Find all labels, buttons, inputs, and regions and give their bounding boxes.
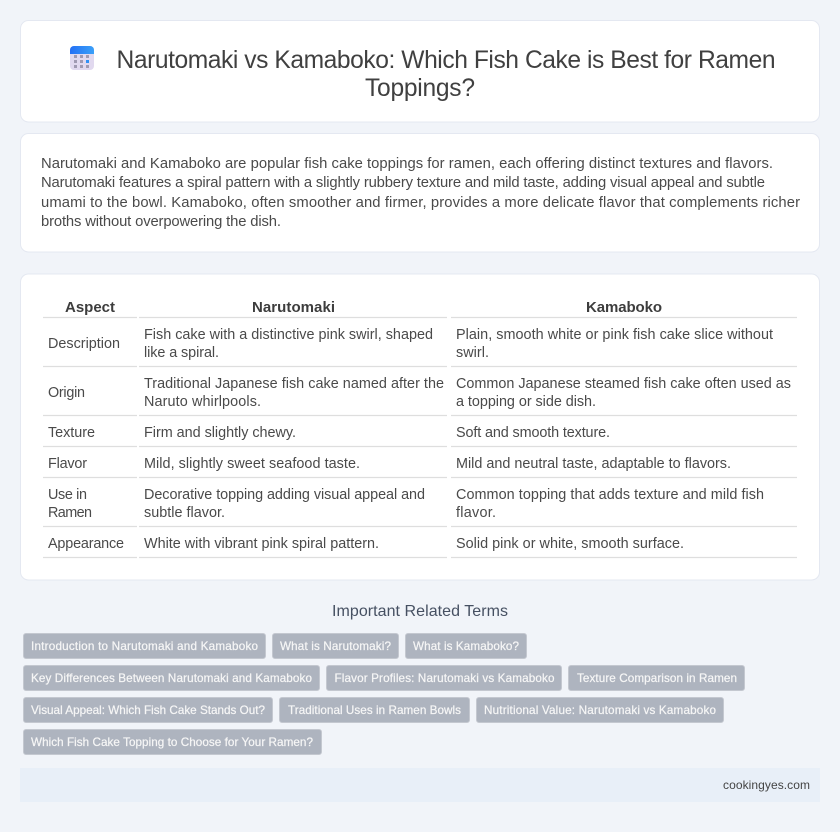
panel: title header	[20, 20, 820, 122]
title: Narutomaki vs Kamaboko: Which Fish Cake is Best for Ramen	[116, 47, 776, 74]
tag: which topping	[24, 730, 322, 754]
row: appearance: White with vibrant pink spiral pattern.	[144, 536, 379, 552]
row: origin: a topping or side dish.	[456, 394, 596, 410]
row: flavor: Mild and neutral taste, adaptable to flavors.	[456, 456, 731, 472]
table header: Aspect	[65, 299, 115, 316]
title	[116, 47, 776, 102]
tag: nutritional value	[476, 698, 724, 722]
footer	[20, 768, 820, 802]
row: flavor: Mild, slightly sweet seafood taste.	[144, 456, 360, 472]
row: use in ramen: subtle flavor.	[144, 505, 225, 521]
row: use in ramen	[48, 487, 764, 521]
row: flavor: Flavor	[48, 456, 87, 472]
row: flavor	[48, 456, 731, 472]
row: texture: Firm and slightly chewy.	[144, 425, 296, 441]
tag: introduction	[24, 634, 266, 658]
row: texture	[48, 425, 610, 441]
row: use in ramen: Ramen	[48, 505, 92, 521]
row: texture: Texture	[48, 425, 95, 441]
row: appearance: Appearance	[48, 536, 124, 552]
row: description: Fish cake with a distinctive pink swirl, shaped	[144, 327, 433, 343]
tag: what is narutomaki	[272, 634, 398, 658]
intro text: Narutomaki features a spiral pattern with a slightly rubbery texture and mild taste, adding visual appeal and subtle	[41, 175, 765, 191]
tag: which topping: Which Fish Cake Topping to Choose for Your Ramen?	[31, 736, 313, 749]
row: origin: Common Japanese steamed fish cake often used as	[456, 376, 791, 392]
title: Toppings?	[365, 75, 475, 102]
row: origin: Naruto whirlpools.	[144, 394, 261, 410]
row: description: Description	[48, 336, 120, 352]
tag: traditional uses: Traditional Uses in Ramen Bowls	[288, 704, 461, 717]
row: description: like a spiral.	[144, 345, 219, 361]
row: description: Plain, smooth white or pink fish cake slice without	[456, 327, 773, 343]
tag: flavor profiles	[326, 666, 562, 690]
row: texture: Soft and smooth texture.	[456, 425, 610, 441]
table header: Narutomaki	[252, 299, 335, 316]
row: origin: Traditional Japanese fish cake named after the	[144, 376, 444, 392]
row: origin	[48, 376, 791, 410]
footer: cookingyes.com	[723, 778, 810, 792]
tag: visual appeal	[24, 698, 272, 722]
heading: important related terms: Important Related Terms	[332, 603, 508, 620]
intro text: umami to the bowl. Kamaboko, often smoother and firmer, provides a more delicate flavor that complements richer	[41, 195, 800, 211]
table header	[65, 299, 662, 316]
table header: Kamaboko	[586, 299, 662, 316]
icon: calendar	[70, 46, 94, 70]
tag: what is kamaboko	[406, 634, 526, 658]
row: description	[48, 327, 773, 361]
row: appearance	[48, 536, 684, 552]
panel: comparison table	[20, 274, 820, 580]
tag: texture comparison	[568, 666, 744, 690]
intro text: broths without overpowering the dish.	[41, 214, 281, 230]
tag: key differences: Key Differences Between Narutomaki and Kamaboko	[31, 672, 312, 685]
tag: what is narutomaki: What is Narutomaki?	[280, 640, 391, 653]
intro text: Narutomaki and Kamaboko are popular fish cake toppings for ramen, each offering distinct textures and flavors.	[41, 156, 773, 172]
tag: key differences	[24, 666, 320, 690]
row: use in ramen: Decorative topping adding visual appeal and	[144, 487, 425, 503]
row: use in ramen: Use in	[48, 487, 87, 503]
tag: introduction: Introduction to Narutomaki and Kamaboko	[31, 640, 258, 653]
tag: traditional uses	[280, 698, 470, 722]
intro text	[41, 156, 800, 230]
tag: nutritional value: Nutritional Value: Narutomaki vs Kamaboko	[484, 704, 716, 717]
tag: visual appeal: Visual Appeal: Which Fish Cake Stands Out?	[31, 704, 265, 717]
row: description: swirl.	[456, 345, 489, 361]
related term tags	[24, 634, 744, 754]
row: use in ramen: Common topping that adds texture and mild fish	[456, 487, 764, 503]
tag: what is kamaboko: What is Kamaboko?	[413, 640, 519, 653]
row: use in ramen: flavor.	[456, 505, 496, 521]
panel: introduction	[20, 134, 820, 252]
tag: texture comparison: Texture Comparison in Ramen	[577, 672, 737, 685]
row: appearance: Solid pink or white, smooth surface.	[456, 536, 684, 552]
row: origin: Origin	[48, 385, 85, 401]
tag: flavor profiles: Flavor Profiles: Narutomaki vs Kamaboko	[334, 672, 555, 685]
